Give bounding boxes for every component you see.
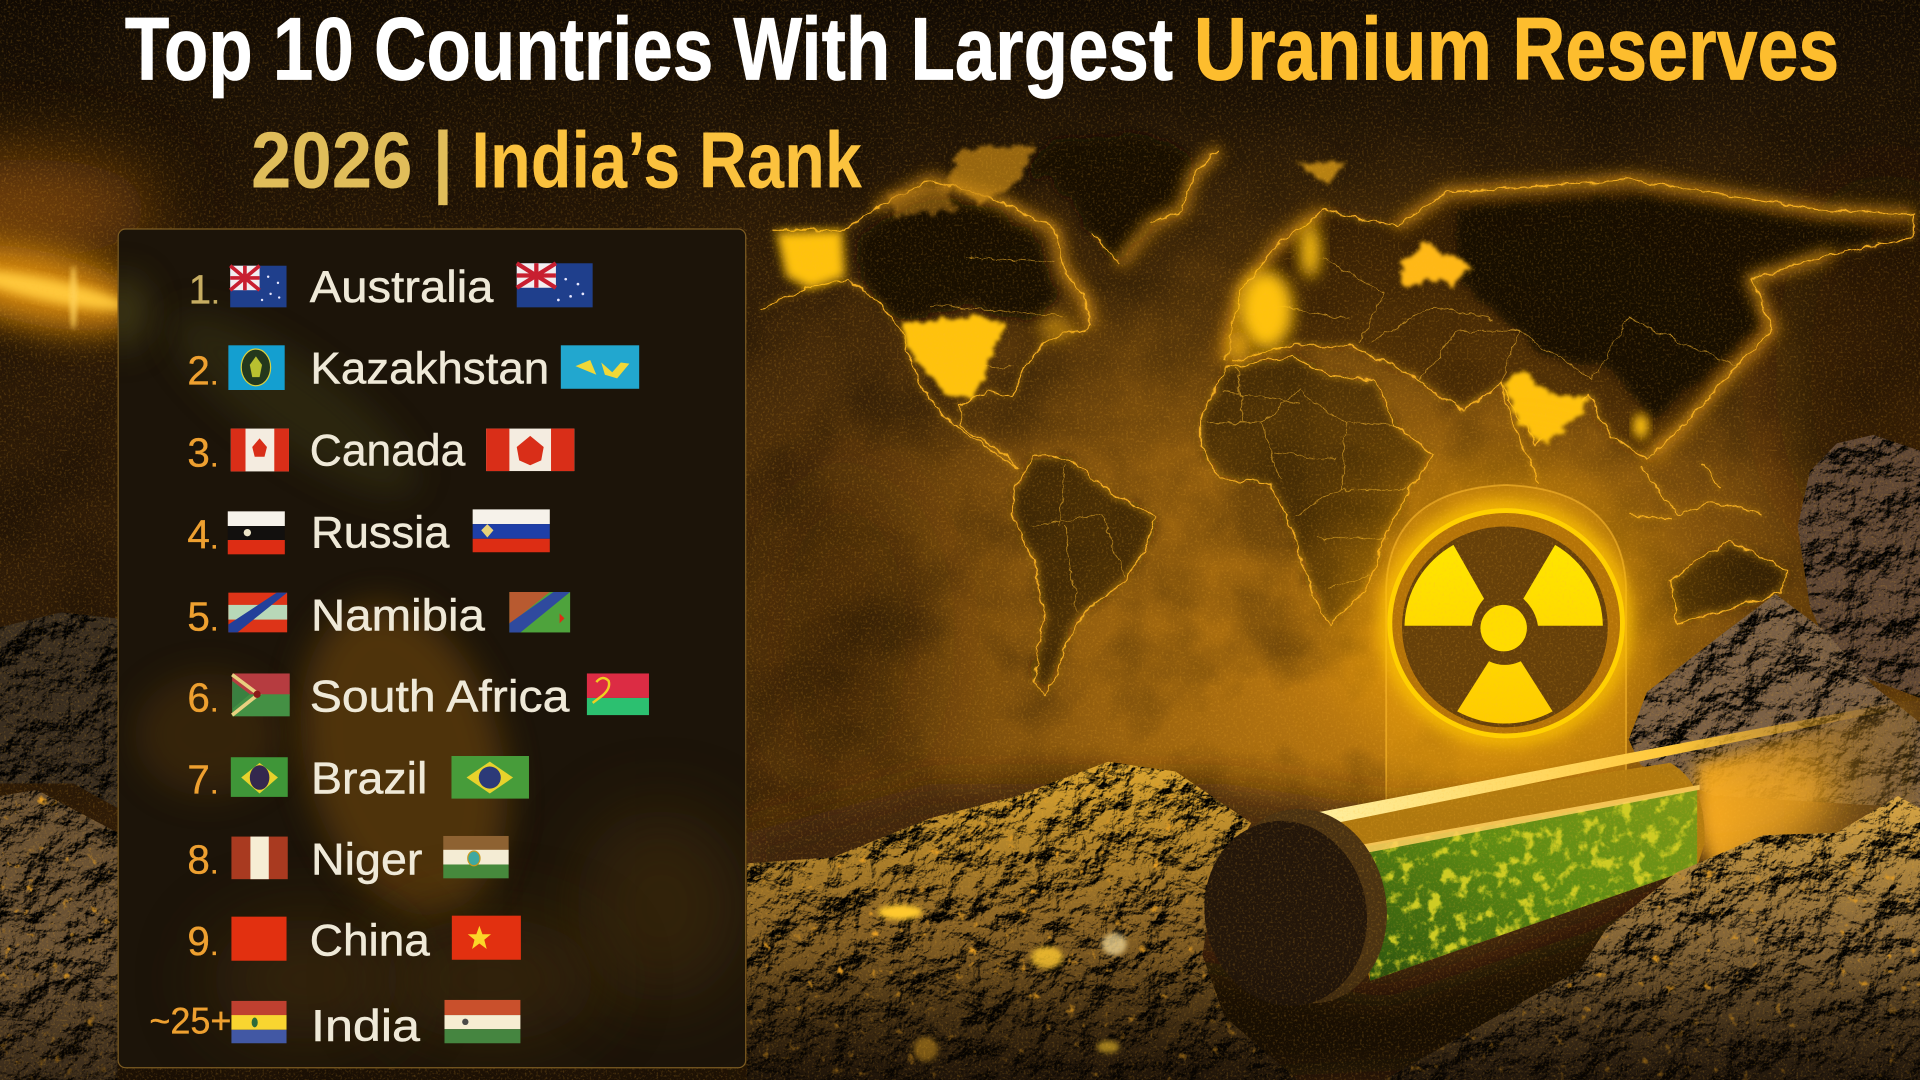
title: white part: Top 10 Countries With Largest <box>125 0 1173 99</box>
ore highlights <box>878 905 1127 1062</box>
flag: Kazakhstan large <box>561 345 639 389</box>
map: highlighted uranium regions <box>776 144 1648 443</box>
title <box>125 0 1839 99</box>
map: country borders <box>931 257 1739 612</box>
flag: Namibia large <box>509 592 570 632</box>
rank: 4. <box>187 512 219 558</box>
tube green uranium contents <box>1360 790 1697 981</box>
radiation symbol pedestal and glow <box>1353 475 1659 808</box>
row: 5 Namibia <box>187 592 570 641</box>
flag: China large <box>452 916 521 960</box>
cave floor behind the tube <box>747 784 1920 1080</box>
rank: 8. <box>187 837 219 883</box>
country name: Australia <box>310 263 494 312</box>
row: 2 Kazakhstan <box>187 344 639 393</box>
rock: left middle <box>0 612 118 808</box>
row: 6 South Africa <box>187 672 649 721</box>
rank: 6. <box>187 674 219 720</box>
rank: 9. <box>187 918 219 964</box>
flag: Australia large <box>517 263 593 307</box>
row: 7 Brazil <box>187 754 529 803</box>
panel: country ranking list <box>96 229 747 1068</box>
flag: India small <box>231 1001 287 1043</box>
rock: left lower <box>0 790 118 1080</box>
rock: foreground right <box>1384 796 1920 1080</box>
country name: Kazakhstan <box>310 344 549 393</box>
flag: China small <box>231 917 287 961</box>
flag: Canada small <box>231 429 289 471</box>
tube end cap <box>1187 794 1405 1021</box>
country name: Namibia <box>311 592 485 641</box>
row: 3 Canada <box>187 426 574 476</box>
bottom vignette <box>0 955 1920 1080</box>
row: 4 Russia <box>187 508 550 558</box>
tube glass body <box>1316 763 1705 981</box>
tube second highlight <box>1360 785 1700 853</box>
flag: Canada large <box>486 429 574 471</box>
flag: Niger small <box>231 837 288 879</box>
flag: Australia small <box>230 266 287 307</box>
rock: mid right boulder <box>1629 594 1920 808</box>
map: glowing coastlines <box>760 149 1914 697</box>
rank: 1. <box>189 267 220 313</box>
flag: South Africa small <box>232 673 290 716</box>
subtitle: year: 2026 | <box>251 115 453 205</box>
radiation symbol <box>1387 508 1625 738</box>
country name: Canada <box>310 426 465 475</box>
tube bright highlight streak <box>1314 700 1910 827</box>
rock: bottom centre golden ore <box>747 762 1298 1080</box>
rank: 3. <box>187 430 219 476</box>
flag: Brazil small <box>231 757 288 797</box>
flag: Russia small <box>228 511 285 554</box>
flag: Brazil large <box>451 756 529 799</box>
rank: 5. <box>187 594 219 640</box>
flag: Kazakhstan small <box>228 345 285 390</box>
flag: India large <box>444 1000 520 1043</box>
rock: upper right boulder <box>1798 435 1920 698</box>
tube motion blur streak <box>1658 698 1920 884</box>
map: landmass shading <box>857 135 1914 697</box>
map: outer coastal glow <box>878 149 1914 459</box>
row: 9 China <box>187 916 521 966</box>
rank: ~25+ <box>149 1000 231 1041</box>
row: 8 Niger <box>187 835 509 884</box>
panel mottled backdrop <box>96 229 747 1068</box>
flag: South Africa large <box>587 673 649 715</box>
flag: Russia large <box>473 509 550 552</box>
rank: 7. <box>187 756 219 802</box>
country name: Russia <box>311 508 450 557</box>
flag: Niger large <box>443 836 509 878</box>
world map <box>760 135 1914 697</box>
row: India <box>149 1000 520 1051</box>
subtitle <box>251 115 863 205</box>
row: 1 Australia <box>189 263 593 313</box>
country name: China <box>310 917 430 966</box>
country name: India <box>311 1002 420 1051</box>
left light flare <box>0 229 152 347</box>
country name: Brazil <box>311 754 427 803</box>
flag: Namibia small <box>228 593 287 632</box>
subtitle: India's rank: India’s Rank <box>471 115 863 204</box>
country name: Niger <box>311 835 423 884</box>
country name: South Africa <box>310 672 570 721</box>
uranium sample tube <box>1187 700 1910 1021</box>
rank: 2. <box>187 347 219 393</box>
